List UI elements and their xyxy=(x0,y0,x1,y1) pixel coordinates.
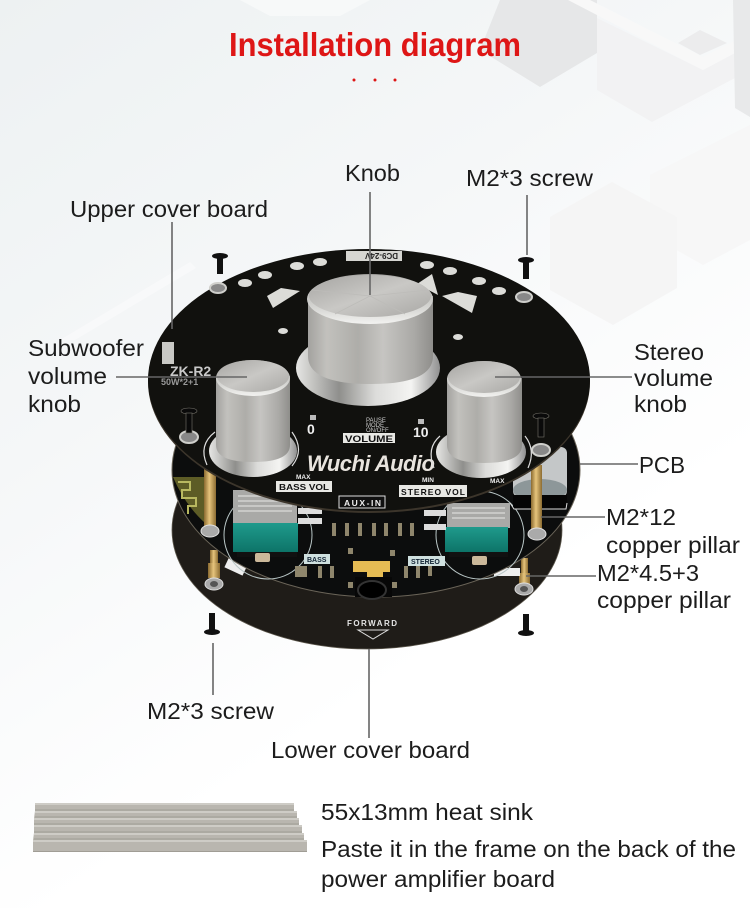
label: M2*4.5+3 copper pillar xyxy=(526,560,731,613)
audio jack xyxy=(353,561,392,599)
volume tag: ON/OFF xyxy=(366,428,389,434)
silkscreen tags xyxy=(304,554,445,566)
icon: left knob xyxy=(209,360,297,477)
label: top screw xyxy=(466,165,593,255)
label: M2*12 copper pillar: M2*12 xyxy=(606,504,676,530)
right potentiometer xyxy=(424,503,510,565)
board tags: BASS VOL xyxy=(279,482,329,492)
label: subwoofer volume knob: knob xyxy=(28,391,81,417)
speaker icons and terminal holes xyxy=(238,258,506,340)
model text: 50W*2+1 xyxy=(161,377,198,387)
label: stereo volume knob: Stereo xyxy=(634,339,704,365)
model text xyxy=(161,342,211,387)
board tags: MAX xyxy=(490,478,505,485)
label: PCB: PCB xyxy=(639,452,685,478)
label: subwoofer volume knob: Subwoofer xyxy=(28,335,144,361)
voltage tag xyxy=(346,251,402,261)
icon: right knob xyxy=(436,361,526,478)
heat sink description: power amplifier board xyxy=(321,866,555,892)
heat sink description: 55x13mm heat sink xyxy=(321,799,534,825)
label: top screw: M2*3 screw xyxy=(466,165,593,191)
label: M2*12 copper pillar: copper pillar xyxy=(606,532,740,558)
icon: screw on board left xyxy=(181,408,197,433)
label: stereo volume knob xyxy=(495,339,713,417)
heat sink description xyxy=(321,799,736,892)
circle outlines xyxy=(224,491,312,579)
board tags: AUX-IN xyxy=(344,498,381,508)
volume tag: VOLUME xyxy=(345,434,393,445)
forward marking: FORWARD xyxy=(347,619,397,628)
lower copper pillars xyxy=(205,550,533,595)
title: Installation diagram xyxy=(229,26,521,63)
board tags xyxy=(276,474,505,508)
upper copper pillars xyxy=(201,465,546,540)
volume tag: PAUSE xyxy=(366,418,386,424)
volume tag xyxy=(343,418,395,445)
label: subwoofer volume knob: volume xyxy=(28,363,107,389)
upper cover board xyxy=(148,249,590,513)
silkscreen tags: STEREO xyxy=(411,559,440,566)
label: stereo volume knob: volume xyxy=(634,365,713,391)
label: M2*4.5+3 copper pillar: M2*4.5+3 xyxy=(597,560,699,586)
dial numbers xyxy=(307,415,429,440)
label: bottom screw xyxy=(147,643,274,724)
mounting rings xyxy=(180,283,550,456)
label: knob xyxy=(345,160,400,295)
board tags: MAX xyxy=(296,474,311,481)
label: PCB xyxy=(580,452,685,478)
icon: screw bottom right xyxy=(518,614,534,636)
wuchi audio script: Wuchi Audio xyxy=(307,451,435,476)
title dots xyxy=(352,78,396,82)
forward marking xyxy=(347,619,397,639)
capacitor xyxy=(513,447,567,497)
silkscreen tags: BASS xyxy=(307,557,327,564)
icon: screw on board right xyxy=(533,413,549,437)
label: bottom screw: M2*3 screw xyxy=(147,698,274,724)
icon: screw top right xyxy=(518,257,534,279)
icon: screw bottom left xyxy=(204,613,220,635)
smd components xyxy=(295,523,432,588)
label: lower cover board: Lower cover board xyxy=(271,737,470,763)
dial arcs xyxy=(204,432,531,468)
icon: heat sink xyxy=(33,803,307,852)
icon: screw top left xyxy=(212,253,228,274)
board tags: STEREO VOL xyxy=(401,487,465,497)
label: upper cover board: Upper cover board xyxy=(70,196,268,222)
dial numbers: 0 xyxy=(307,421,315,437)
label: knob: Knob xyxy=(345,160,400,186)
voltage tag: DC9-24V xyxy=(364,251,398,260)
left potentiometer xyxy=(233,490,322,562)
label: M2*12 copper pillar xyxy=(541,504,740,558)
dial numbers: 10 xyxy=(413,424,429,440)
heat sink description: Paste it in the frame on the back of the xyxy=(321,836,736,862)
model text: ZK-R2 xyxy=(170,363,211,379)
board tags: MIN xyxy=(422,477,434,484)
label: subwoofer volume knob xyxy=(28,335,247,417)
lower cover board xyxy=(172,411,562,649)
PCB xyxy=(172,343,580,599)
volume tag: MODE xyxy=(366,423,384,429)
label: M2*4.5+3 copper pillar: copper pillar xyxy=(597,587,731,613)
bluetooth antenna xyxy=(173,477,205,523)
label: stereo volume knob: knob xyxy=(634,391,687,417)
icon: center knob xyxy=(296,274,440,406)
